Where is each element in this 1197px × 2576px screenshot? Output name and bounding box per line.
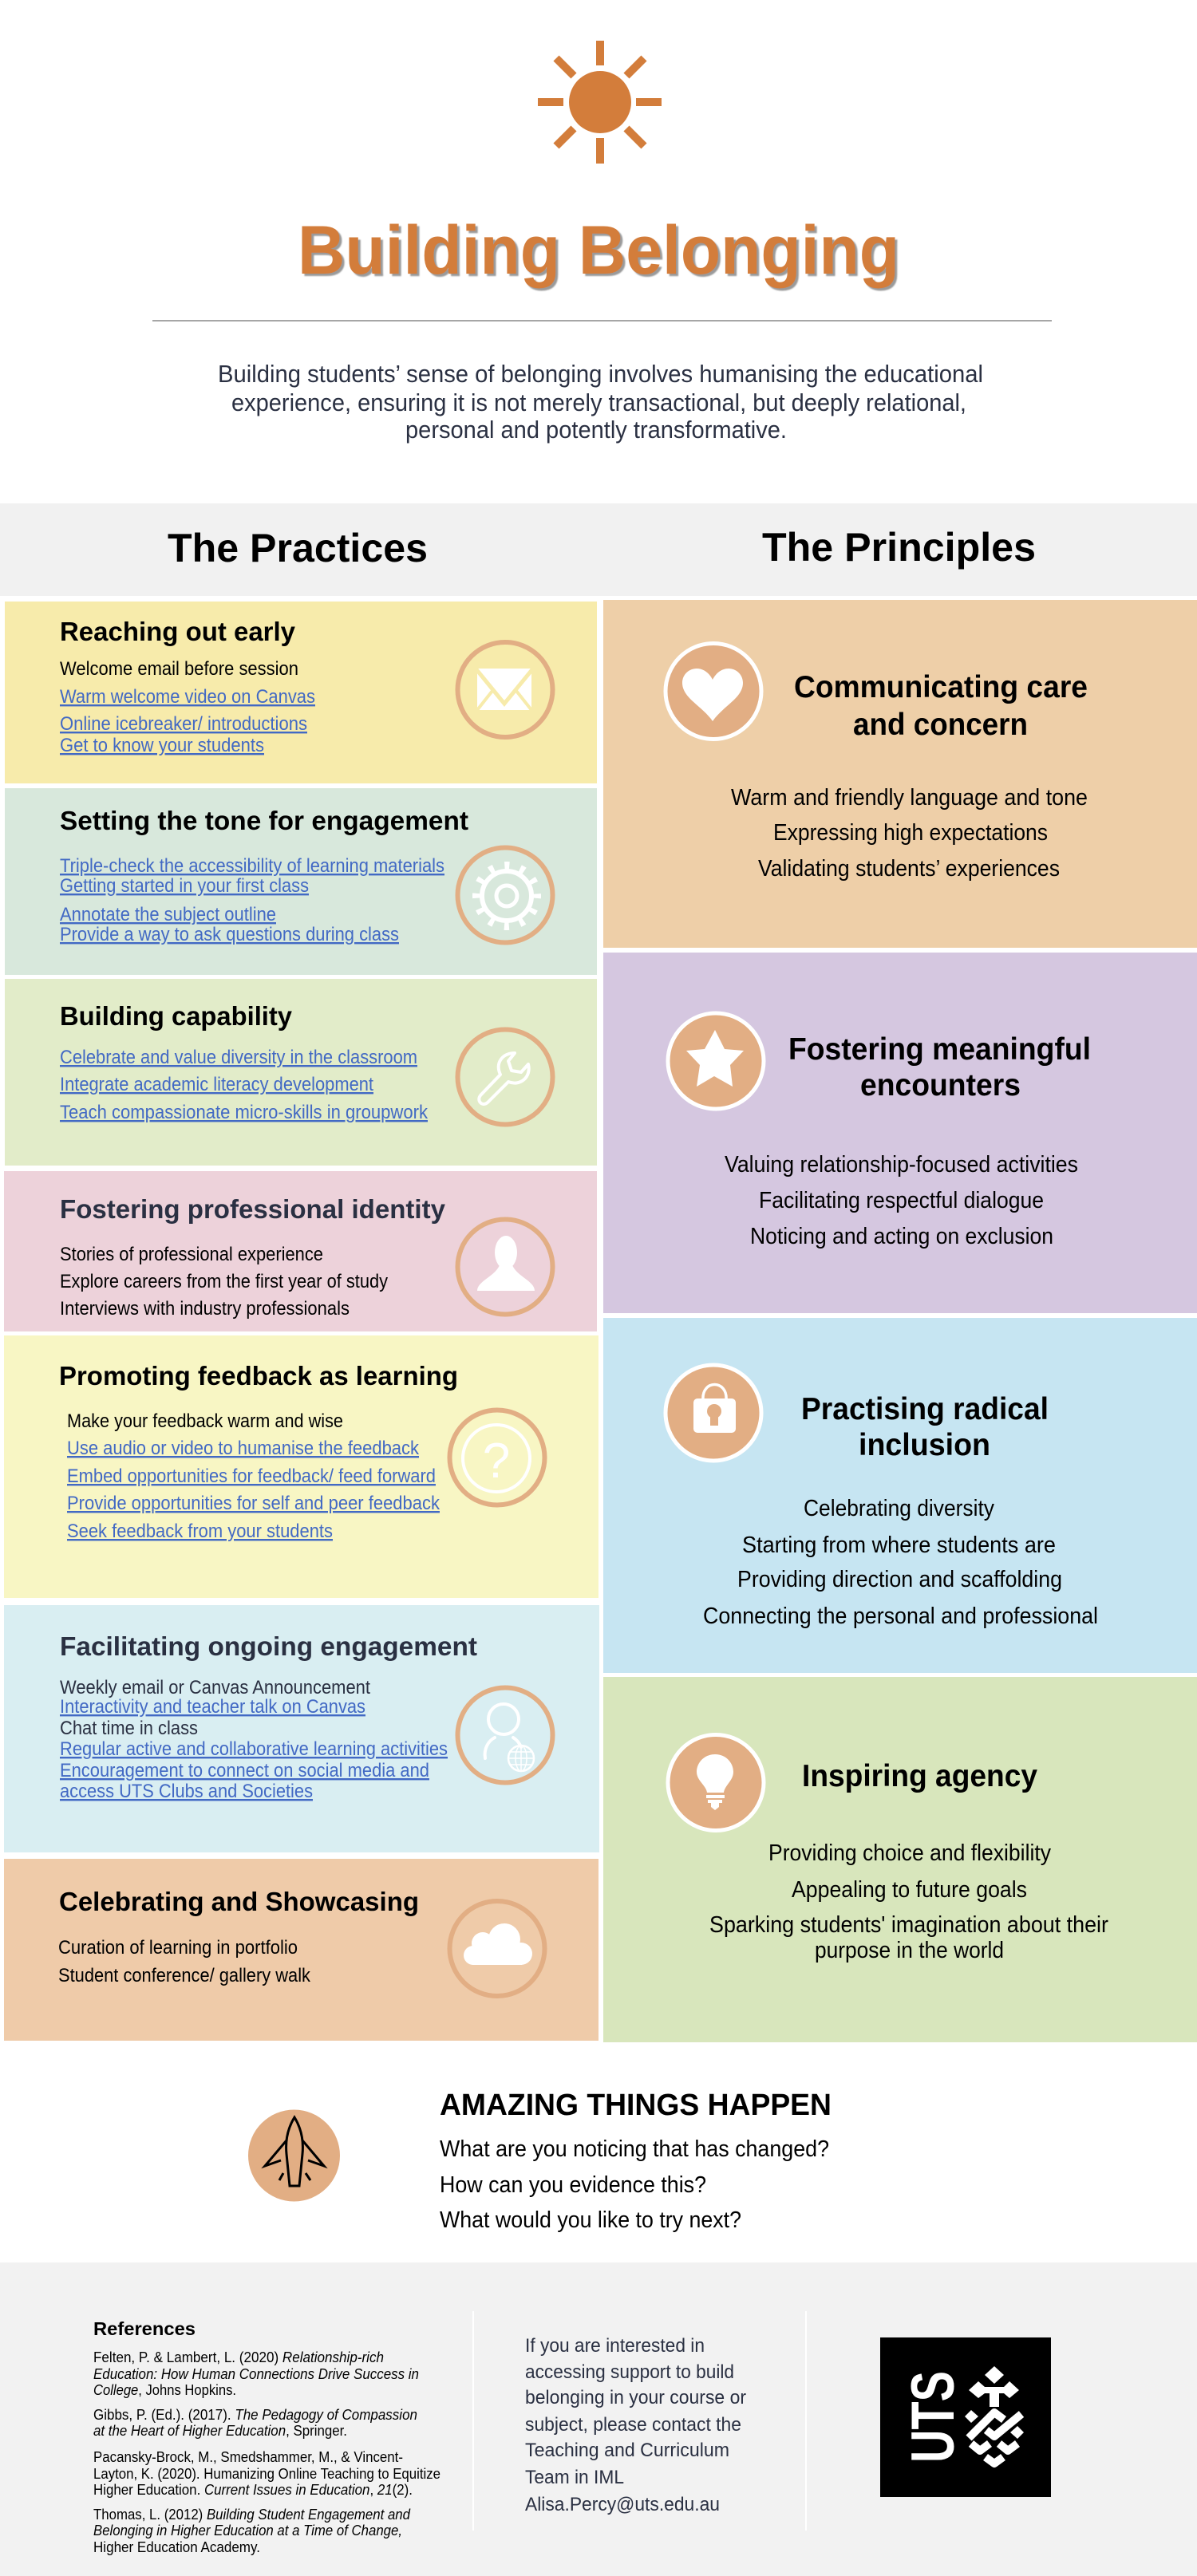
practice list: [60, 658, 315, 756]
practice list: Interviews with industry professionals: [60, 1298, 350, 1320]
practice list: Embed opportunities for feedback/ feed forward: [67, 1466, 436, 1487]
logo: UTS: UTS: [899, 2371, 967, 2463]
principle title: encounters: [860, 1068, 1021, 1103]
contact text: belonging in your course or: [525, 2387, 746, 2408]
principle title: [801, 1392, 1049, 1462]
intro text block: [218, 360, 983, 444]
heading: Setting the tone for engagement: [60, 806, 468, 835]
principle title: Communicating care: [794, 670, 1088, 704]
contact text: If you are interested in: [525, 2335, 705, 2357]
principle list: purpose in the world: [815, 1938, 1004, 1963]
heading: Reaching out early: [60, 617, 296, 646]
practice list: Chat time in class: [60, 1718, 198, 1739]
principle list: Celebrating diversity: [804, 1496, 995, 1521]
icon: person: [458, 1219, 552, 1315]
practice links: Teach compassionate micro-skills in groupwork: [60, 1102, 429, 1123]
practice links: Getting started in your first class: [60, 875, 309, 897]
principle title: [788, 1032, 1091, 1103]
practice links: [60, 1047, 429, 1123]
panel: fostering meaningful encounters: [603, 953, 1197, 1313]
practice list: access UTS Clubs and Societies: [60, 1781, 313, 1802]
references: Layton, K. (2020). Humanizing Online Teaching to Equitize: [93, 2466, 440, 2482]
heading: the practices: The Practices: [168, 526, 428, 570]
contact text: Team in IML: [525, 2467, 624, 2488]
principle list: Providing direction and scaffolding: [737, 1567, 1062, 1592]
callout: amazing things happen: [440, 2089, 832, 2233]
practice list: [60, 1244, 388, 1320]
practice list: [58, 1937, 311, 1986]
principle title: Practising radical: [801, 1392, 1049, 1426]
contact text: accessing support to build: [525, 2361, 734, 2383]
icon: star: [668, 1013, 764, 1109]
practice list: Get to know your students: [60, 735, 264, 756]
principle list: [703, 1496, 1098, 1629]
practice list: Weekly email or Canvas Announcement: [60, 1677, 370, 1698]
references: Thomas, L. (2012) Building Student Engagement and: [93, 2507, 411, 2523]
references: Pacansky-Brock, M., Smedshammer, M., & Vincent-: [93, 2449, 403, 2465]
practice list: Regular active and collaborative learning activities: [60, 1738, 448, 1760]
practice links: Triple-check the accessibility of learning materials: [60, 855, 444, 877]
principle list: Connecting the personal and professional: [703, 1604, 1098, 1629]
principle list: Starting from where students are: [742, 1533, 1056, 1558]
practice list: Student conference/ gallery walk: [58, 1965, 311, 1986]
practice list: Stories of professional experience: [60, 1244, 323, 1265]
icon: envelope: [458, 642, 552, 737]
references: Belonging in Higher Education at a Time of Change,: [93, 2523, 402, 2539]
practice list: Explore careers from the first year of study: [60, 1271, 388, 1292]
heading: the principles: The Principles: [762, 525, 1036, 570]
heading: Celebrating and Showcasing: [59, 1887, 419, 1916]
panel: building capability: [5, 979, 597, 1166]
principle list: Noticing and acting on exclusion: [750, 1224, 1053, 1249]
principle list: Facilitating respectful dialogue: [759, 1188, 1044, 1213]
heading: Facilitating ongoing engagement: [60, 1631, 477, 1661]
practice list: [60, 1677, 448, 1802]
icon: wrench: [458, 1029, 552, 1125]
heading: Promoting feedback as learning: [59, 1361, 458, 1391]
footer panel: [0, 2262, 1197, 2576]
contact text: subject, please contact the: [525, 2414, 741, 2436]
practice list: [67, 1410, 440, 1542]
references: Education: How Human Connections Drive Success in: [93, 2366, 419, 2382]
principle list: [709, 1840, 1108, 1963]
callout: amazing things happen: What would you like to try next?: [440, 2207, 741, 2233]
principle list: Sparking students' imagination about their: [709, 1912, 1108, 1938]
contact text: Teaching and Curriculum: [525, 2440, 729, 2461]
intro text block: personal and potently transformative.: [405, 416, 787, 444]
practice links: [60, 855, 444, 945]
icon: sun: [538, 41, 662, 164]
icon: question mark: [450, 1410, 544, 1505]
practice list: Make your feedback warm and wise: [67, 1410, 343, 1432]
practice links: Annotate the subject outline: [60, 904, 276, 925]
principle list: Validating students’ experiences: [758, 856, 1060, 882]
practice list: Online icebreaker/ introductions: [60, 713, 307, 735]
panel: fostering professional identity: [4, 1171, 597, 1331]
references: Gibbs, P. (Ed.). (2017). The Pedagogy of Compassion: [93, 2407, 417, 2423]
intro text block: experience, ensuring it is not merely transactional, but deeply relational,: [231, 389, 966, 416]
panel: inspiring agency: [603, 1677, 1197, 2042]
principle list: Expressing high expectations: [773, 820, 1048, 846]
practice links: Celebrate and value diversity in the classroom: [60, 1047, 417, 1068]
principle title: Inspiring agency: [802, 1759, 1037, 1793]
principle list: [731, 785, 1088, 882]
principle list: Appealing to future goals: [792, 1877, 1027, 1903]
practice list: Welcome email before session: [60, 658, 298, 680]
practice links: Provide a way to ask questions during class: [60, 924, 399, 945]
references: at the Heart of Higher Education, Springer.: [93, 2423, 347, 2439]
contact text: Alisa.Percy@uts.edu.au: [525, 2494, 720, 2515]
icon: gear: [458, 847, 552, 943]
panel: promoting feedback as learning: [4, 1335, 598, 1598]
panel: celebrating and showcasing: [4, 1859, 598, 2041]
principle title: inclusion: [859, 1428, 990, 1462]
heading: Fostering professional identity: [60, 1194, 446, 1224]
panel: facilitating ongoing engagement: [4, 1605, 599, 1852]
references: Felten, P. & Lambert, L. (2020) Relationship-rich: [93, 2349, 384, 2365]
practice list: Provide opportunities for self and peer feedback: [67, 1493, 440, 1514]
icon: heart: [666, 643, 761, 739]
logo: UTS: [880, 2337, 1051, 2497]
principle list: Providing choice and flexibility: [768, 1840, 1052, 1866]
contact text: [525, 2335, 746, 2515]
practice list: Seek feedback from your students: [67, 1521, 333, 1542]
references: [93, 2318, 440, 2555]
callout: amazing things happen: How can you evidence this?: [440, 2172, 706, 2198]
principle title: Fostering meaningful: [788, 1032, 1091, 1067]
icon: question mark: ?: [483, 1434, 510, 1489]
principle list: [725, 1152, 1078, 1249]
panel: practising radical inclusion: [603, 1318, 1197, 1673]
principle title: [794, 670, 1088, 742]
principle title: and concern: [853, 708, 1028, 742]
heading: Building capability: [60, 1001, 293, 1031]
practice links: Integrate academic literacy development: [60, 1074, 373, 1095]
principle list: Valuing relationship-focused activities: [725, 1152, 1078, 1178]
icon: light bulb: [668, 1734, 764, 1830]
panel: reaching out early: [5, 602, 597, 783]
icon: padlock: [666, 1365, 761, 1461]
practice list: Interactivity and teacher talk on Canvas: [60, 1696, 365, 1718]
references: References: [93, 2318, 196, 2339]
icon: rocket: [248, 2109, 340, 2202]
intro text block: Building students’ sense of belonging involves humanising the educational: [218, 360, 983, 388]
practice list: Curation of learning in portfolio: [58, 1937, 298, 1959]
practice list: Use audio or video to humanise the feedback: [67, 1438, 420, 1459]
section header band: [0, 503, 1197, 596]
icon: person with globe: [458, 1688, 552, 1782]
practice list: Encouragement to connect on social media and: [60, 1760, 429, 1781]
title: Building Belonging: [298, 212, 899, 289]
callout: amazing things happen: AMAZING THINGS HAPPEN: [440, 2089, 832, 2122]
panel: communicating care and concern: [603, 600, 1197, 948]
references: Higher Education Academy.: [93, 2539, 260, 2555]
principle list: Warm and friendly language and tone: [731, 785, 1088, 811]
callout: amazing things happen: What are you noticing that has changed?: [440, 2136, 829, 2162]
practice list: Warm welcome video on Canvas: [60, 686, 315, 708]
icon: cloud: [450, 1901, 544, 1996]
references: College, Johns Hopkins.: [93, 2382, 236, 2398]
references: Higher Education. Current Issues in Education, 21(2).: [93, 2482, 413, 2498]
panel: setting the tone for engagement: [5, 788, 597, 975]
